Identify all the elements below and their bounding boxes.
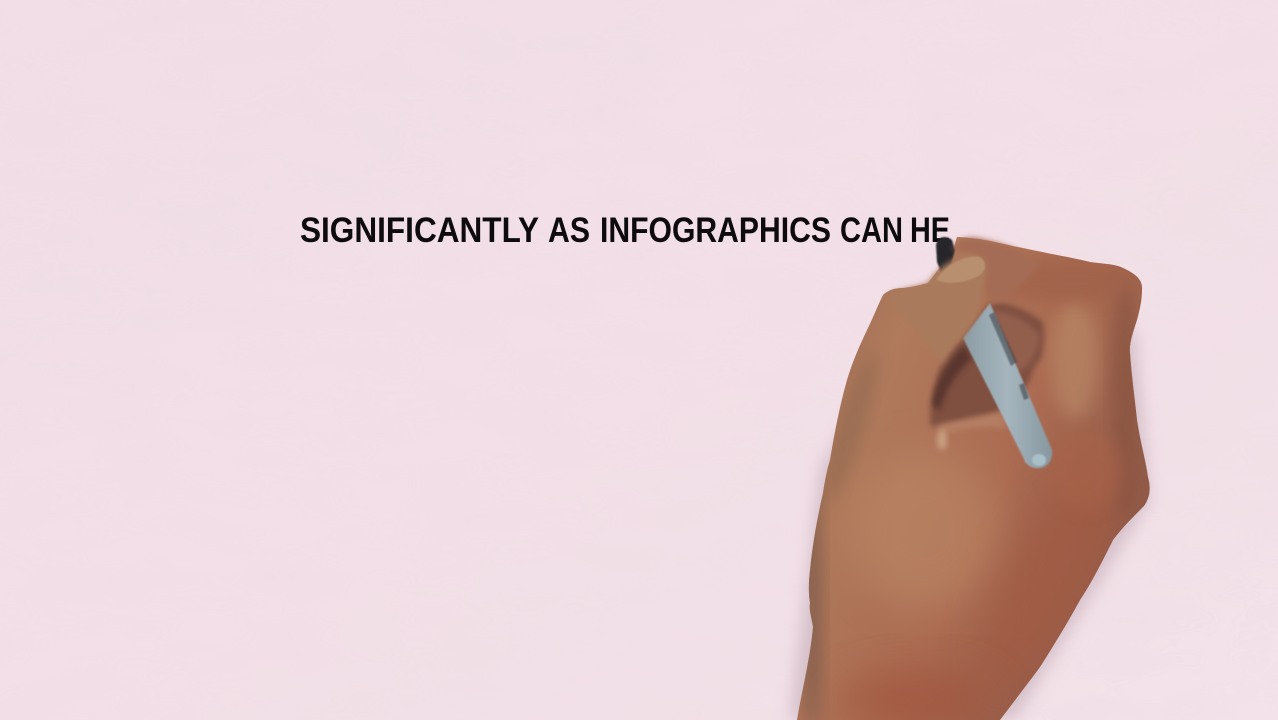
marker label bbox=[989, 312, 1029, 400]
knuckle highlight bbox=[937, 430, 947, 450]
handwritten heading text bbox=[300, 211, 950, 250]
marker end cap bbox=[1032, 454, 1046, 466]
hand shadow bbox=[790, 290, 1150, 720]
handwritten heading text: INFOGRAPHICS bbox=[600, 211, 831, 250]
handwritten heading text: CAN bbox=[840, 211, 903, 250]
palm gap between fingers bbox=[930, 303, 1044, 427]
index finger over pen bbox=[953, 238, 1040, 305]
hand holding marker bbox=[797, 237, 1150, 720]
handwritten heading text: HE bbox=[910, 211, 950, 250]
thumb bbox=[886, 255, 986, 365]
marker body bbox=[963, 303, 1052, 468]
hand base shape bbox=[797, 237, 1150, 720]
shadow under thumb bbox=[932, 345, 972, 410]
handwritten heading text: AS bbox=[548, 211, 590, 250]
thumbnail bbox=[936, 256, 985, 283]
skin shading bbox=[802, 258, 1146, 720]
whiteboard scene bbox=[300, 217, 1154, 720]
finger in the gap bbox=[990, 310, 1040, 372]
marker tip bbox=[936, 237, 955, 272]
palm fold below gap bbox=[937, 412, 1006, 436]
handwritten heading text: SIGNIFICANTLY bbox=[300, 211, 539, 250]
